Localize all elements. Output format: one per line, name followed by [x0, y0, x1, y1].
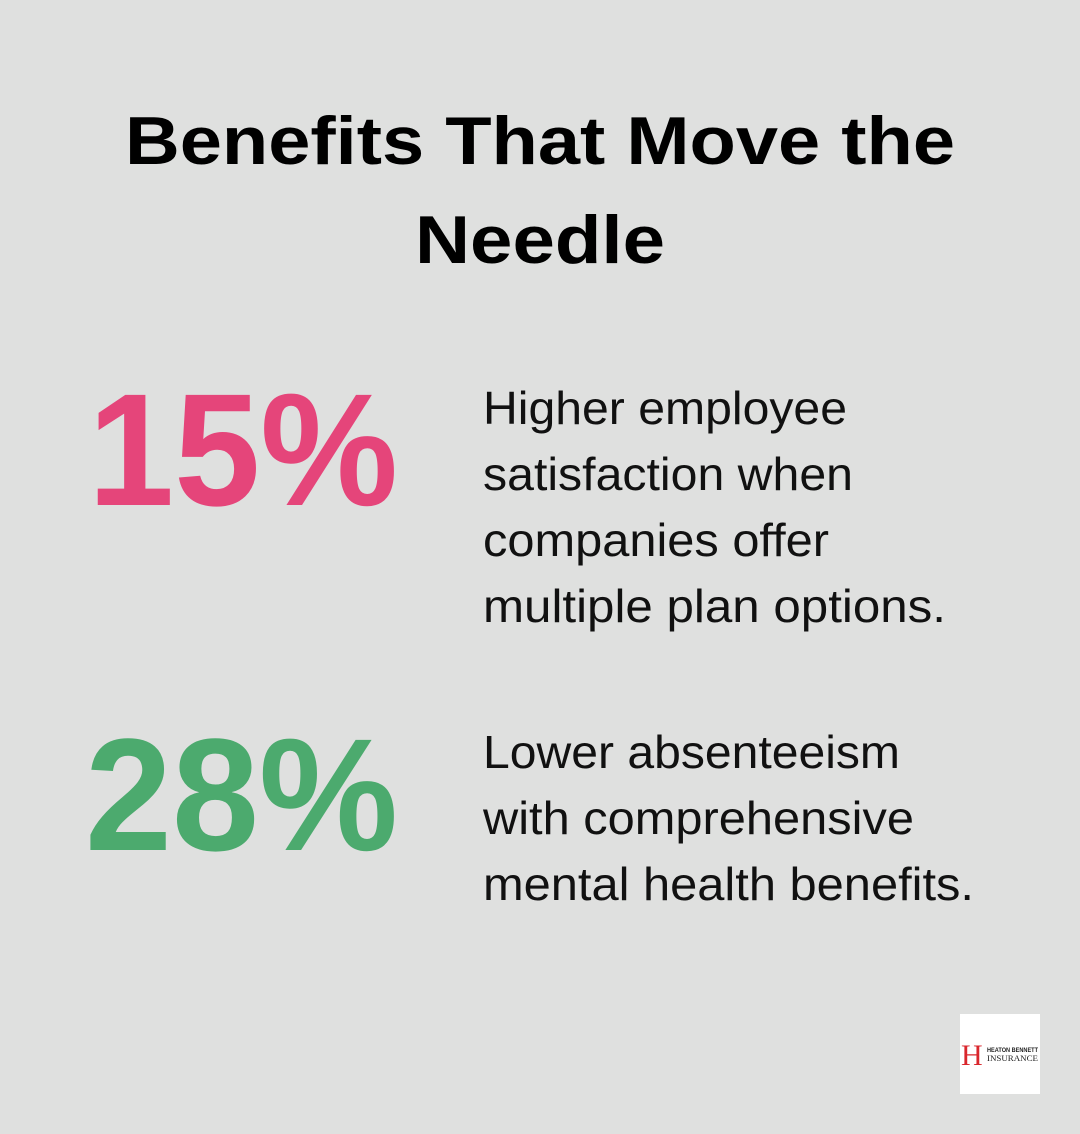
logo — [960, 1014, 1040, 1094]
stat: 15% — [88, 360, 946, 632]
description 28% — [482, 726, 974, 910]
logo: HEATON BENNETT — [987, 1048, 1038, 1054]
description 15%: multiple plan options. — [483, 580, 946, 632]
title: Benefits That Move the — [125, 103, 955, 179]
description 28%: Lower absenteeism — [483, 726, 900, 778]
title: Needle — [415, 202, 665, 278]
logo: H — [961, 1039, 983, 1072]
description 28%: with comprehensive — [482, 792, 914, 844]
description 15%: Higher employee — [483, 382, 847, 434]
stat: 28% — [85, 705, 974, 910]
description 15%: satisfaction when — [483, 448, 853, 500]
number 28%: 28% — [85, 705, 398, 884]
title — [125, 103, 955, 278]
description 15%: companies offer — [483, 514, 829, 566]
number 15%: 15% — [88, 360, 398, 539]
description 15% — [483, 382, 946, 632]
logo: INSURANCE — [987, 1054, 1038, 1063]
description 28%: mental health benefits. — [483, 858, 974, 910]
